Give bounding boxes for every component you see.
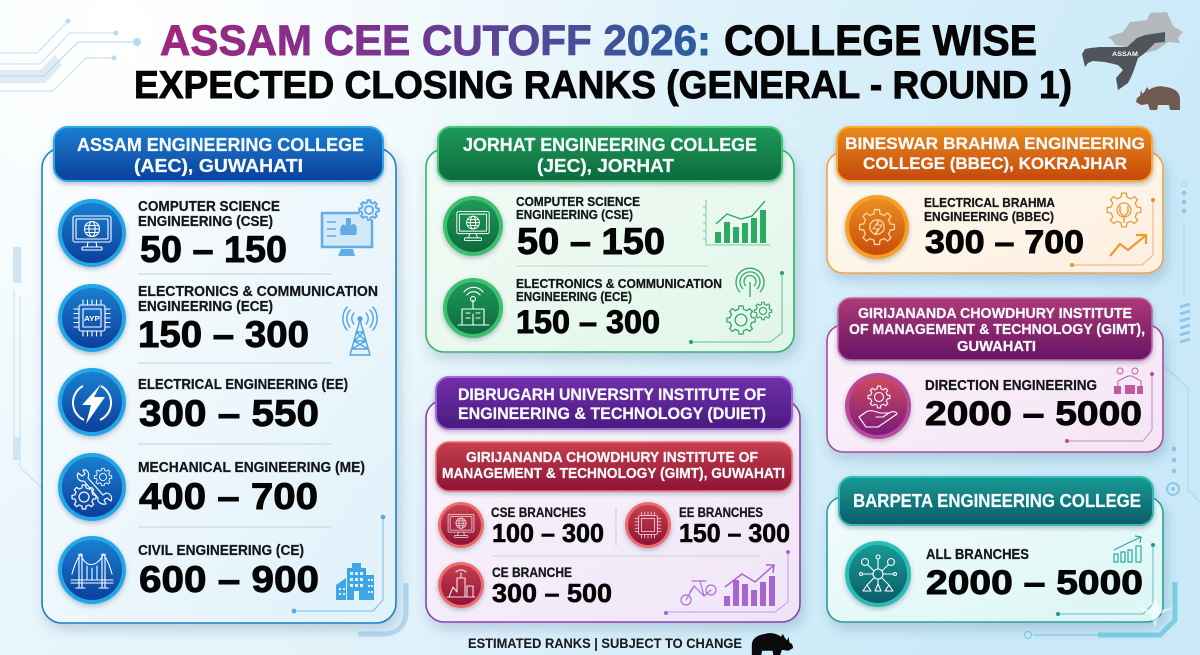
row: all branches: ALL BRANCHES <box>926 547 1029 563</box>
circuit decoration: top left <box>0 18 141 91</box>
icon: bar chart <box>703 200 770 245</box>
row: CSE: ENGINEERING (CSE) <box>516 208 633 222</box>
heading: JEC <box>438 127 782 181</box>
heading: DUIET: ENGINEERING & TECHNOLOGY (DUIET) <box>458 404 766 423</box>
circuit trace <box>664 550 790 615</box>
heading: GIMT: OF MANAGEMENT & TECHNOLOGY (GIMT), <box>849 321 1145 338</box>
row: direction engineering: DIRECTION ENGINEERING <box>925 378 1097 394</box>
panel: Barpeta Engineering College <box>827 477 1163 622</box>
icon: scale <box>681 581 716 605</box>
title <box>134 17 1072 107</box>
heading: GIMT: GIRIJANANDA CHOWDHURY INSTITUTE OF <box>466 450 758 466</box>
row: ECE: ELECTRONICS & COMMUNICATION <box>138 284 378 300</box>
row: CSE <box>443 195 665 262</box>
heading: GIMT <box>838 298 1152 360</box>
row: CSE: ENGINEERING (CSE) <box>138 214 273 230</box>
map of Assam: ASSAM <box>1112 51 1138 58</box>
title: EXPECTED CLOSING RANKS (GENERAL - ROUND 1) <box>134 64 1072 107</box>
row: CSE <box>58 199 287 270</box>
row: ECE: ELECTRONICS & COMMUNICATION <box>516 277 722 291</box>
heading: GIMT: GIRIJANANDA CHOWDHURY INSTITUTE <box>858 305 1132 322</box>
item: EE branches <box>625 502 790 548</box>
row: CE: 600 – 900 <box>139 559 319 600</box>
row: CE: CIVIL ENGINEERING (CE) <box>138 543 304 559</box>
row: electrical brahma: ENGINEERING (BBEC) <box>924 209 1054 224</box>
heading: JEC: (JEC), JORHAT <box>537 156 674 176</box>
heading: Barpeta <box>839 477 1153 525</box>
row: all branches: 2000 – 5000 <box>926 564 1143 602</box>
icon: monitor with gear <box>322 200 379 256</box>
icon: buildings <box>336 563 374 600</box>
icon: rising bars <box>724 565 775 606</box>
divider <box>138 443 331 445</box>
divider <box>615 507 617 546</box>
rhino: top right <box>1133 86 1180 110</box>
row: ECE: 150 – 300 <box>516 304 660 340</box>
sparkle <box>1135 597 1175 627</box>
row: EE: ELECTRICAL ENGINEERING (EE) <box>138 377 348 393</box>
divider <box>138 362 331 364</box>
row: ECE: ENGINEERING (ECE) <box>516 290 632 304</box>
row: ME <box>58 453 365 521</box>
item: CSE branches: 100 – 300 <box>492 520 604 548</box>
circuit trace <box>1056 543 1155 616</box>
icon: tower <box>343 307 377 355</box>
item: EE branches: 150 – 300 <box>679 520 790 548</box>
icon: workflow <box>1114 368 1143 394</box>
icon: trend arrow <box>1110 235 1146 256</box>
circuit decoration: bottom right <box>1024 582 1175 638</box>
heading: Barpeta: BARPETA ENGINEERING COLLEGE <box>853 491 1141 511</box>
item: CE branche: 300 – 500 <box>492 580 612 608</box>
corner arc decoration <box>358 583 406 634</box>
heading: AEC: ASSAM ENGINEERING COLLEGE <box>77 135 364 155</box>
row: all branches <box>845 541 1143 607</box>
row: CSE: COMPUTER SCIENCE <box>516 195 640 209</box>
divider <box>493 555 759 557</box>
row: EE: 300 – 550 <box>139 393 319 434</box>
item: CSE branches: CSE BRANCHES <box>491 505 586 520</box>
row: ECE <box>58 284 378 355</box>
row: electrical brahma: ELECTRICAL BRAHMA <box>924 195 1056 210</box>
row: CSE: 50 – 150 <box>517 221 665 262</box>
item: EE branches: EE BRANCHES <box>679 505 763 520</box>
map of Assam <box>1082 12 1183 90</box>
circuit decoration: left side <box>13 247 42 488</box>
heading: GIMT: GUWAHATI <box>957 338 1036 355</box>
heading: BBEC: COLLEGE (BBEC), KOKRAJHAR <box>863 154 1127 173</box>
row: ECE <box>443 277 722 340</box>
divider <box>138 526 331 528</box>
row: direction engineering: 2000 – 5000 <box>925 395 1142 433</box>
row: electrical brahma <box>845 195 1084 260</box>
row: electrical brahma: 300 – 700 <box>925 224 1084 260</box>
row: CSE: COMPUTER SCIENCE <box>138 199 280 215</box>
row: direction engineering <box>845 373 1142 439</box>
row: ECE: ENGINEERING (ECE) <box>138 299 273 315</box>
row: CSE: 50 – 150 <box>140 229 287 270</box>
heading: BBEC: BINESWAR BRAHMA ENGINEERING <box>845 134 1145 153</box>
heading: GIMT: MANAGEMENT & TECHNOLOGY (GIMT), GUWAHATI <box>442 466 785 482</box>
footer note: ESTIMATED RANKS | SUBJECT TO CHANGE <box>468 636 742 652</box>
heading: AEC <box>54 127 383 181</box>
circuit trace <box>1070 198 1155 267</box>
divider <box>516 265 709 267</box>
row: EE <box>58 368 348 436</box>
item: CE branche: CE BRANCHE <box>492 565 572 580</box>
panel: Assam Engineering College <box>42 127 396 623</box>
row: ME: 400 – 700 <box>139 476 318 517</box>
row: ME: MECHANICAL ENGINEERING (ME) <box>138 460 365 476</box>
item: CE branche <box>438 562 612 608</box>
heading: JEC: JORHAT ENGINEERING COLLEGE <box>463 135 757 155</box>
circuit trace <box>689 271 784 344</box>
panel: GIMT Guwahati <box>827 298 1163 452</box>
item: CSE branches <box>438 502 604 548</box>
rhino: footer <box>752 633 796 655</box>
divider <box>138 273 331 275</box>
heading: DUIET <box>436 377 792 429</box>
heading: DUIET: DIBRUGARH UNIVERSITY INSTITUTE OF <box>458 385 766 404</box>
icon: gear wrench <box>1107 193 1141 227</box>
circuit trace <box>1065 372 1154 443</box>
row: ECE: 150 – 300 <box>138 314 309 355</box>
heading: AEC: (AEC), GUWAHATI <box>134 156 303 176</box>
panel: DUIET and GIMT branches <box>426 377 800 622</box>
heading: GIMT <box>436 442 792 491</box>
icon: growth bars <box>1114 536 1141 562</box>
panel: Bineswar Brahma Engineering College <box>827 127 1163 273</box>
title: ASSAM CEE CUTOFF 2026: <box>160 17 711 65</box>
circuit trace <box>292 515 385 613</box>
row: ECE: AYP <box>84 316 100 323</box>
heading: BBEC <box>837 127 1152 181</box>
circuit decoration: right side <box>1163 182 1200 502</box>
title: COLLEGE WISE <box>724 17 1037 65</box>
row: CE <box>58 536 319 604</box>
icon: antenna and gears <box>727 268 772 334</box>
panel: Jorhat Engineering College <box>426 127 794 352</box>
